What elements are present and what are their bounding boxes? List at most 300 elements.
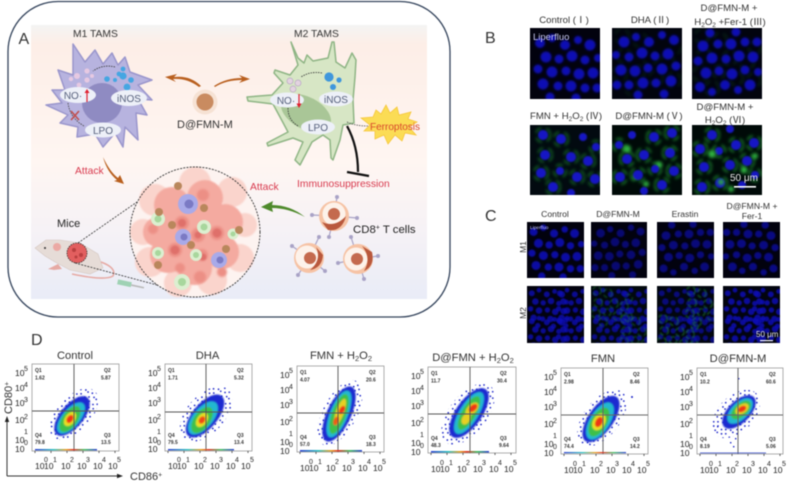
plot: D@FMN + H2O2: 10: [457, 464, 467, 474]
label: Attack left: Attack: [75, 166, 104, 177]
plot titles: D@FMN + H: [432, 352, 497, 364]
plot: FMN: 3: [553, 401, 557, 408]
plot: FMN: 14.2: [630, 444, 640, 450]
plot: D@FMN-M: 5: [689, 370, 693, 377]
column labels: 2: [580, 116, 584, 123]
plot: DHA: 4: [235, 457, 239, 464]
plot: FMN: 2.98: [564, 380, 574, 386]
plot: FMN + H2O2: 0: [289, 442, 293, 449]
plot: D@FMN + H2O2: 10: [411, 418, 421, 428]
plot: D@FMN-M: 3: [751, 461, 755, 468]
plot: FMN + H2O2: 10: [280, 385, 290, 395]
image: FMN + H2O2: [529, 124, 601, 196]
plot: Control: 10: [15, 383, 25, 393]
label: Immunosuppression: Immunosuppression: [297, 179, 390, 190]
image: M1 D@FMN-M: [590, 221, 648, 279]
label: CD80+: +: [4, 382, 11, 386]
plot: FMN + H2O2: 2: [335, 459, 339, 466]
plot: FMN: 10: [573, 465, 583, 475]
plot: D@FMN + H2O2: 4: [420, 385, 424, 392]
plot: D@FMN + H2O2: 11.7: [431, 378, 441, 384]
label: Attack right: Attack: [250, 182, 279, 193]
plot: D@FMN-M: Q4: [700, 437, 707, 443]
plot: FMN + H2O2: 18.3: [366, 442, 376, 448]
M1 macrophage cell: [46, 44, 152, 147]
plot: DHA: 5.32: [234, 376, 244, 382]
plot: Control: 2: [24, 414, 28, 421]
plot: FMN: 10: [622, 465, 632, 475]
plot: D@FMN-M: 10: [680, 419, 690, 429]
plot: D@FMN-M: Q2: [769, 372, 776, 378]
plot: DHA: 10: [177, 461, 187, 471]
label: Liperfluo: Liperfluo: [533, 32, 569, 43]
plot: FMN + H2O2: 20.6: [366, 378, 376, 384]
plot: FMN: [544, 368, 650, 475]
column labels: [530, 3, 766, 127]
plot: D@FMN-M: 1: [718, 461, 722, 468]
plot: FMN: 0: [573, 461, 577, 468]
plot: FMN: 10: [637, 465, 647, 475]
plot: FMN: 8.46: [630, 380, 640, 386]
panel letter D: D: [31, 332, 43, 349]
plot: Control: 1.62: [35, 376, 45, 382]
column labels: (Ⅵ): [726, 115, 745, 126]
column labels: D@FMN-M +: [727, 201, 777, 211]
label: CD8+ T cells: CD8: [353, 224, 376, 236]
plot: Control: 0: [44, 457, 48, 464]
plot: D@FMN-M: 2: [735, 461, 739, 468]
plot: FMN + H2O2: 10: [342, 463, 352, 473]
mouse illustration: [35, 202, 157, 285]
plot: D@FMN-M: [680, 368, 786, 475]
plot: D@FMN + H2O2: 5: [513, 460, 517, 467]
image: M2 Erastin: [656, 285, 715, 344]
plot: FMN + H2O2: 2: [289, 416, 293, 423]
plot: Control: 0: [24, 440, 28, 447]
column labels: 2: [712, 120, 716, 127]
column labels: D@FMN-M: [596, 209, 640, 219]
plot: Control: 10: [44, 461, 54, 471]
column labels: [541, 201, 777, 221]
plot: DHA: 4: [157, 382, 161, 389]
plot: DHA: 2: [157, 414, 161, 421]
plot: DHA: 10: [148, 444, 158, 454]
heading: M2 TAMS: M2 TAMS: [294, 29, 339, 40]
label: D@FMN-M: D@FMN-M: [177, 119, 233, 131]
arrow: attack: [103, 157, 124, 184]
plot titles: 2: [368, 354, 372, 363]
plot: FMN: 2: [553, 418, 557, 425]
image: M1 D@FMN-M + Fer-1: [722, 221, 781, 279]
plot: FMN + H2O2: 3: [351, 459, 355, 466]
plot: DHA: 10: [148, 398, 158, 408]
column labels: O: [705, 17, 712, 28]
column labels: O: [715, 115, 723, 126]
plot: D@FMN + H2O2: 30.4: [497, 378, 507, 384]
label: CD8+ T cells: T cells: [380, 224, 416, 236]
plot: D@FMN-M: 3: [689, 401, 693, 408]
panel letter B: B: [485, 30, 496, 47]
plot: DHA: 0: [177, 457, 181, 464]
nanoparticle: D@FMN-M: [177, 90, 233, 131]
row label: M2: M2: [518, 307, 528, 319]
plot: Control: 5: [117, 457, 121, 464]
plot: DHA: 5: [157, 366, 161, 373]
plot: D@FMN + H2O2: 2: [420, 417, 424, 424]
plot: D@FMN + H2O2: Q3: [500, 436, 507, 442]
plot: FMN + H2O2: 5: [289, 368, 293, 375]
image: M1 control: [526, 221, 585, 279]
column labels: +Fer-1 (Ⅲ): [716, 17, 766, 28]
plot: FMN: 10: [606, 465, 616, 475]
plot: Control: 79.8: [35, 440, 45, 446]
plot: D@FMN + H2O2: 2: [466, 460, 470, 467]
plot: Control: 5.87: [101, 376, 111, 382]
plot: D@FMN-M: 1: [689, 433, 693, 440]
plot: FMN: 10: [544, 448, 554, 458]
label: LPO: LPO: [93, 126, 113, 137]
plot: D@FMN + H2O2: 10: [473, 464, 483, 474]
image: D@FMN-M: [611, 124, 683, 196]
plot: DHA: 5: [250, 457, 254, 464]
plot: FMN: 4: [553, 386, 557, 393]
image: Control: [529, 27, 601, 100]
plot: FMN + H2O2: Q1: [300, 370, 307, 376]
plot: Control: [15, 364, 121, 471]
plot: D@FMN-M: 60.6: [766, 380, 776, 386]
plot: Control: 10: [77, 461, 87, 471]
plot: FMN: Q1: [564, 372, 571, 378]
plot: D@FMN + H2O2: 10: [411, 401, 421, 411]
plot: FMN + H2O2: 1: [289, 431, 293, 438]
plot: FMN + H2O2: 4: [289, 384, 293, 391]
plot: FMN + H2O2: 1: [318, 459, 322, 466]
plot: FMN: 74.4: [564, 444, 574, 450]
plot: D@FMN + H2O2: Q1: [431, 371, 438, 377]
plot: Control: 10: [93, 461, 103, 471]
column labels: FMN + H: [530, 111, 569, 122]
plot: Control: 10: [35, 461, 45, 471]
syringe: [117, 279, 145, 290]
plot: Control: 1: [53, 457, 57, 464]
panel letter A: A: [18, 31, 30, 48]
plot: D@FMN-M: Q3: [769, 437, 776, 443]
plot: Control: 4: [102, 457, 106, 464]
plot: Control: 3: [24, 397, 28, 404]
plot: Control: 3: [86, 457, 90, 464]
plot: D@FMN + H2O2: 9.64: [499, 443, 509, 449]
image: M1 Erastin: [656, 221, 715, 279]
panel C: M1 and M2 microscopy: [485, 201, 789, 357]
plot: D@FMN + H2O2: [411, 367, 517, 474]
plot: D@FMN-M: 10: [726, 465, 736, 475]
label: iNOS: iNOS: [324, 95, 348, 106]
plot: D@FMN-M: 10: [758, 465, 768, 475]
plot: D@FMN + H2O2: Q4: [431, 436, 438, 442]
plot titles: 2: [497, 356, 501, 365]
inhibition symbol: [347, 126, 369, 176]
plot: D@FMN-M: 2: [689, 418, 693, 425]
plot titles: FMN: [591, 353, 615, 365]
plot: FMN: 10: [544, 387, 554, 397]
plot: FMN + H2O2: 10: [280, 400, 290, 410]
plot: Control: 5: [24, 366, 28, 373]
plot: D@FMN + H2O2: 5: [420, 369, 424, 376]
column labels: 2: [569, 116, 573, 123]
plot: FMN: 0: [553, 444, 557, 451]
plot: Control: 10: [15, 444, 25, 454]
heading: M1 TAMS: M1 TAMS: [73, 29, 118, 40]
plot titles: O: [501, 352, 510, 364]
arrow: to M2: [214, 75, 250, 87]
panel D: flow cytometry: [3, 332, 786, 483]
plot: DHA: 3: [219, 457, 223, 464]
plot: FMN + H2O2: [280, 366, 386, 473]
plot titles: Control: [57, 350, 93, 362]
plot: Control: 10: [108, 461, 118, 471]
image: D@FMN-M + H2O2: [691, 124, 763, 196]
plot: Control: 4: [24, 382, 28, 389]
plot: FMN + H2O2: 57.0: [300, 442, 310, 448]
plot: DHA: 10: [194, 461, 204, 471]
plot: D@FMN-M: 4: [767, 461, 771, 468]
ferroptosis burst: [347, 105, 420, 144]
plot: FMN: 10: [544, 372, 554, 382]
plot: D@FMN-M: 5: [782, 461, 786, 468]
column labels: H: [694, 17, 701, 28]
plot: DHA: 2: [203, 457, 207, 464]
label: CD86+: +: [158, 472, 162, 479]
plot: Control: Q2: [104, 368, 111, 374]
plot: Control: 10: [15, 368, 25, 378]
column labels: D@FMN-M (Ⅴ): [615, 111, 683, 122]
scale bar: 50 um: 50 μm: [756, 330, 779, 339]
plot: FMN + H2O2: 4.07: [300, 378, 310, 384]
plot: Control: 1: [24, 429, 28, 436]
plot: FMN: 10: [544, 419, 554, 429]
T cell 2: [290, 235, 327, 277]
T cell 3: [336, 235, 380, 281]
tumour magnified view: [130, 167, 260, 297]
plot: FMN + H2O2: 10: [373, 463, 383, 473]
plot: D@FMN-M: 10: [742, 465, 752, 475]
plot: Control: 2: [70, 457, 74, 464]
plot: D@FMN + H2O2: 3: [482, 460, 486, 467]
column labels: D@FMN-M +: [697, 102, 754, 113]
plot: FMN + H2O2: Q3: [369, 435, 376, 441]
column labels: Fer-1: [742, 211, 762, 221]
plot: FMN + H2O2: 10: [280, 370, 290, 380]
plot: D@FMN-M: Q1: [700, 372, 707, 378]
column labels: 2: [723, 120, 727, 127]
column labels: Erastin: [672, 209, 699, 219]
plot titles: 2: [355, 354, 359, 363]
image: D@FMN-M + H2O2 + Fer-1: [691, 27, 763, 100]
label: Mice: Mice: [57, 218, 80, 230]
arrow: green T cell attack: [261, 201, 305, 217]
plot: DHA: [148, 364, 254, 471]
plot: D@FMN-M: 0: [689, 444, 693, 451]
label: Liperfluo small: Liperfluo: [530, 225, 549, 231]
label: CD80+: CD80: [3, 386, 15, 414]
plot: Control: 10: [15, 435, 25, 445]
plot titles: DHA: [196, 350, 220, 362]
plot: FMN + H2O2: 0: [309, 459, 313, 466]
plot: FMN: Q4: [564, 437, 571, 443]
column labels: 2: [701, 22, 705, 29]
plot titles: 2: [510, 356, 514, 365]
plot: Control: 10: [15, 415, 25, 425]
plot: DHA: 10: [241, 461, 251, 471]
label: LPO: LPO: [308, 123, 328, 134]
plot: D@FMN-M: 10: [709, 465, 719, 475]
arrow: to M1: [165, 74, 201, 87]
M2 macrophage cell: [247, 42, 356, 165]
plot: FMN + H2O2: 10: [280, 446, 290, 456]
plot: Control: Q4: [35, 433, 42, 439]
plot titles: [57, 350, 766, 365]
plot: DHA: 10: [148, 435, 158, 445]
plot: DHA: 79.5: [168, 440, 178, 446]
column labels: DHA (Ⅱ): [631, 15, 669, 26]
label: CD86+: CD86: [130, 471, 158, 483]
plot: FMN: 5: [553, 370, 557, 377]
plot: D@FMN + H2O2: 3: [420, 400, 424, 407]
plot titles: FMN + H: [310, 350, 355, 362]
T cell 1: [310, 195, 359, 239]
plot: D@FMN + H2O2: 10: [431, 464, 441, 474]
plot: DHA: 10: [148, 383, 158, 393]
plot: Control: Q3: [104, 433, 111, 439]
plot: FMN: 10: [590, 465, 600, 475]
plot: DHA: 1: [186, 457, 190, 464]
plot: D@FMN + H2O2: 10: [411, 447, 421, 457]
plot: D@FMN + H2O2: 10: [440, 464, 450, 474]
plot: D@FMN + H2O2: 10: [411, 438, 421, 448]
row label: M1: M1: [518, 241, 528, 253]
plot: DHA: 10: [168, 461, 178, 471]
axis: CD80 and CD86 arrows: [3, 382, 123, 478]
plot: Control: 10: [15, 398, 25, 408]
plot: FMN: 10: [564, 465, 574, 475]
plot: D@FMN + H2O2: 10: [411, 386, 421, 396]
plot: FMN + H2O2: 10: [309, 463, 319, 473]
plot: D@FMN-M: 8.19: [700, 444, 710, 450]
plot: DHA: 10: [210, 461, 220, 471]
image: M2 D@FMN-M + Fer-1: [722, 285, 781, 344]
plot: D@FMN-M: 10: [680, 387, 690, 397]
plot titles: D@FMN-M: [710, 353, 766, 365]
plot: DHA: 1.71: [168, 376, 178, 382]
image: M2 D@FMN-M: [590, 285, 648, 344]
immune cells in tumour: [151, 182, 243, 290]
plot: D@FMN-M: 10: [680, 372, 690, 382]
plot: FMN: Q2: [633, 372, 640, 378]
plot: FMN + H2O2: 10: [280, 437, 290, 447]
column labels: (Ⅳ): [583, 111, 602, 122]
plot: D@FMN-M: 10: [700, 465, 710, 475]
column labels: 2: [712, 22, 716, 29]
plot: DHA: 10: [226, 461, 236, 471]
plot: DHA: 10: [148, 368, 158, 378]
plot: FMN: 4: [631, 461, 635, 468]
label: CD8+ T cells: +: [376, 224, 380, 232]
plot: D@FMN-M: 10.2: [700, 380, 710, 386]
plot: D@FMN + H2O2: 0: [420, 443, 424, 450]
plot: FMN: 3: [615, 461, 619, 468]
plot: D@FMN + H2O2: 4: [498, 460, 502, 467]
plot: D@FMN + H2O2: 10: [489, 464, 499, 474]
column labels: D@FMN-M +: [701, 3, 758, 14]
plot: DHA: Q2: [237, 368, 244, 374]
label: iNOS: iNOS: [117, 94, 141, 105]
column labels: Control (Ⅰ): [539, 15, 589, 26]
plot: D@FMN-M: 4: [689, 386, 693, 393]
plot titles: O: [359, 350, 368, 362]
plot: FMN + H2O2: 3: [289, 399, 293, 406]
column labels: O: [572, 111, 580, 122]
plot: D@FMN-M: 10: [680, 448, 690, 458]
image: DHA: [611, 27, 683, 100]
label: NO: NO·: [64, 91, 82, 102]
plot: FMN + H2O2: 10: [300, 463, 310, 473]
plot: FMN: Q3: [633, 437, 640, 443]
panel B: Liperfluo microscopy: [485, 3, 766, 197]
plot: D@FMN + H2O2: 10: [411, 371, 421, 381]
column labels: Control: [541, 209, 569, 219]
plot: FMN: 10: [544, 402, 554, 412]
plot: FMN + H2O2: Q2: [369, 370, 376, 376]
plot: FMN + H2O2: 10: [280, 417, 290, 427]
plot: FMN + H2O2: 4: [367, 459, 371, 466]
plot: D@FMN + H2O2: 48.3: [431, 443, 441, 449]
plot: DHA: 0: [157, 440, 161, 447]
plot: Control: Q1: [35, 368, 42, 374]
plot: DHA: 10: [148, 415, 158, 425]
plot: D@FMN + H2O2: 1: [449, 460, 453, 467]
plot: D@FMN-M: 10: [680, 402, 690, 412]
plot: DHA: Q3: [237, 433, 244, 439]
plot: Control: 10: [61, 461, 71, 471]
plot: DHA: Q1: [168, 368, 175, 374]
plot: D@FMN-M: 0: [709, 461, 713, 468]
plot: DHA: 1: [157, 429, 161, 436]
plot: D@FMN-M: 10: [680, 439, 690, 449]
plot: DHA: 13.4: [234, 440, 244, 446]
plot: FMN: 1: [582, 461, 586, 468]
plot: Control: 13.5: [101, 440, 111, 446]
image: M2 control: [526, 285, 585, 344]
plot: FMN + H2O2: 5: [382, 459, 386, 466]
plot: FMN + H2O2: Q4: [300, 435, 307, 441]
plot: D@FMN + H2O2: Q2: [500, 371, 507, 377]
label: Ferroptosis: Ferroptosis: [370, 122, 420, 133]
plot: DHA: Q4: [168, 433, 175, 439]
plot: FMN: 2: [599, 461, 603, 468]
plot: FMN: 10: [544, 439, 554, 449]
panel A: mechanism schematic: [8, 2, 450, 317]
column labels: H: [705, 115, 712, 126]
plot: D@FMN-M: 10: [773, 465, 783, 475]
plot: D@FMN + H2O2: 10: [504, 464, 514, 474]
plot: D@FMN-M: 5.06: [766, 444, 776, 450]
panel letter C: C: [485, 208, 497, 225]
plot: DHA: 3: [157, 397, 161, 404]
label: NO: NO·: [277, 96, 295, 107]
plot: D@FMN + H2O2: 1: [420, 432, 424, 439]
plot: FMN + H2O2: 10: [326, 463, 336, 473]
scale bar: 50 um: 50 μm: [730, 173, 758, 184]
